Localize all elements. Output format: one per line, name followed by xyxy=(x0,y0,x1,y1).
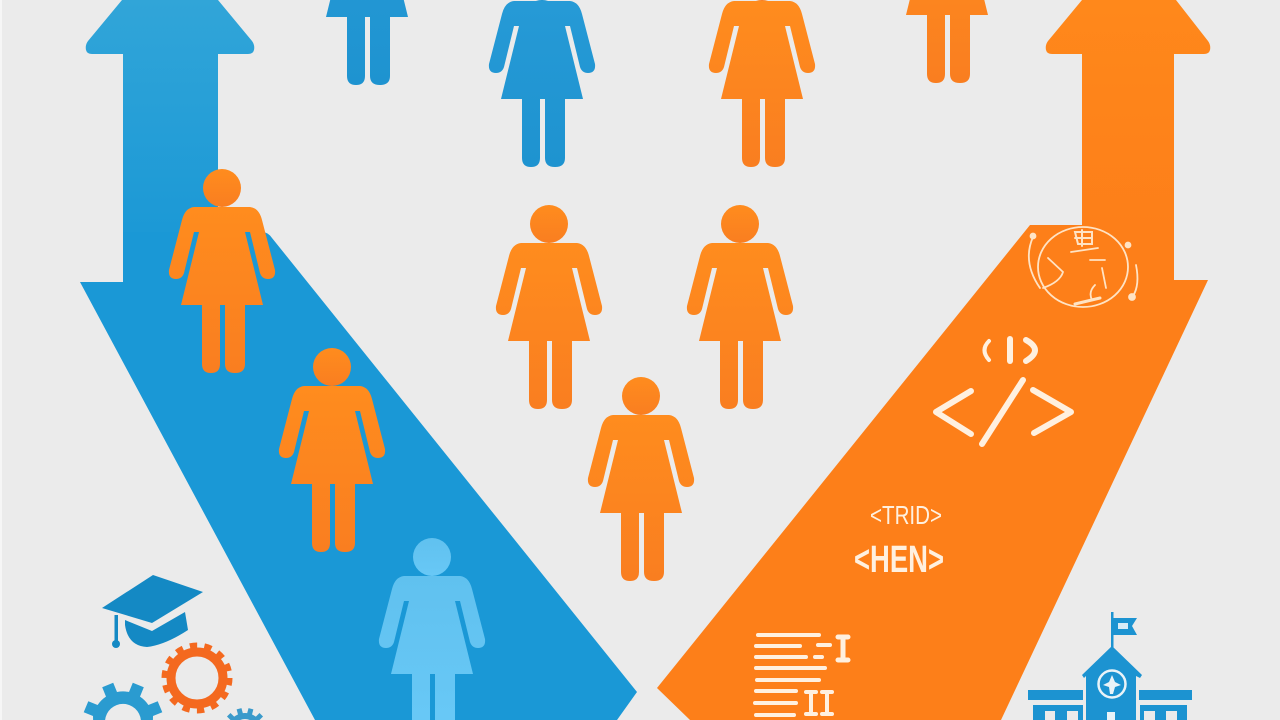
icon: text lines document xyxy=(755,635,848,715)
person: orange middle left xyxy=(496,205,602,409)
icon: blue gear small xyxy=(227,708,263,720)
person: orange lower centre xyxy=(588,377,694,581)
person: light blue on blue path xyxy=(379,538,485,720)
person: orange top centre xyxy=(709,0,815,167)
icon: code brackets xyxy=(936,339,1071,444)
icon: graduation cap xyxy=(102,575,203,648)
person: blue top centre xyxy=(489,0,595,167)
person: orange on blue path middle xyxy=(279,348,385,552)
icon: orange gear xyxy=(166,647,228,709)
code tag text: HEN: <HEN> xyxy=(854,539,944,581)
person: orange middle right xyxy=(687,205,793,409)
icon: globe outline xyxy=(1029,227,1137,307)
person: blue top left xyxy=(314,0,420,85)
icon: blue gear large xyxy=(84,683,162,720)
person: orange on blue path upper xyxy=(169,169,275,373)
code tag text: TRID: <TRID> xyxy=(870,500,942,530)
arrow: blue pathway xyxy=(80,0,637,720)
arrow: orange pathway xyxy=(657,0,1210,720)
left edge strip xyxy=(0,0,2,720)
icon: school building xyxy=(1028,612,1192,720)
person: orange top right xyxy=(894,0,1000,83)
